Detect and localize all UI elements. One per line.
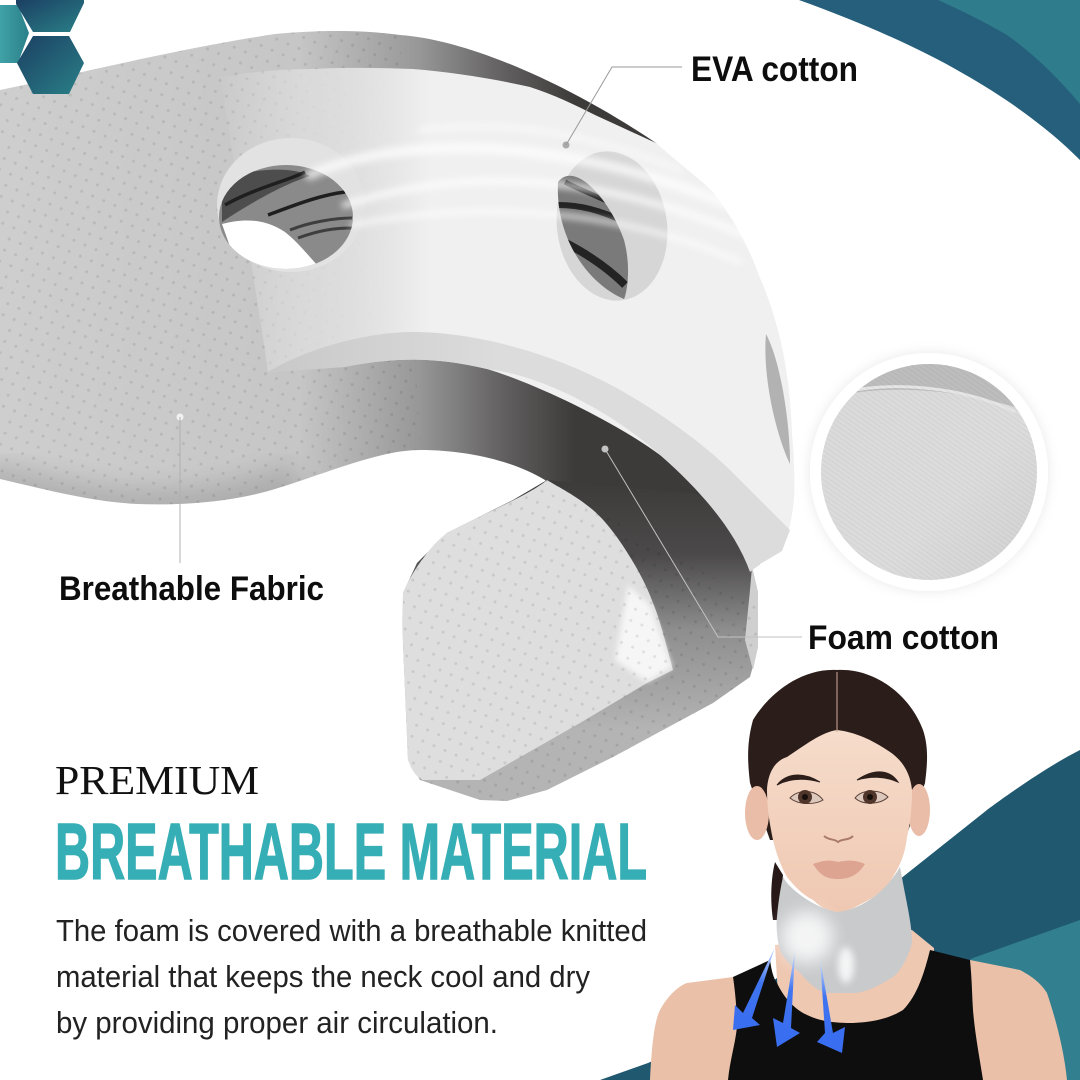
brace EVA white shell — [220, 68, 794, 564]
callout: Foam cotton — [602, 446, 999, 657]
braid — [771, 862, 783, 920]
vent hole left — [217, 138, 353, 272]
brace foam highlight — [615, 585, 672, 682]
body text: The foam is covered with a breathable knitted — [56, 913, 647, 948]
heading: premium: PREMIUM — [55, 757, 259, 803]
callout: EVA cotton — [562, 50, 858, 148]
body text: by providing proper air circulation. — [56, 1005, 498, 1040]
icon: hexagon cluster — [0, 0, 84, 94]
callout: EVA cotton: EVA cotton — [691, 50, 858, 89]
brace foam mesh — [403, 480, 758, 801]
ears — [745, 786, 769, 840]
woman with neck brace — [650, 670, 1067, 1080]
vent hole right — [556, 152, 668, 300]
brace shell rim — [268, 332, 790, 572]
neck brace on woman — [777, 867, 912, 993]
inset: knit texture circle — [810, 353, 1048, 591]
brace side hole — [765, 334, 790, 464]
callout: Foam cotton: Foam cotton — [808, 619, 999, 657]
body text — [56, 913, 647, 1040]
brace silhouette: fabric, top edge and under arch — [0, 31, 760, 660]
brace foam back facet — [403, 480, 760, 801]
face — [767, 730, 912, 912]
background shape: bottom right teal — [600, 750, 1080, 1080]
product: neck brace — [0, 31, 794, 801]
callout: Breathable Fabric — [59, 414, 324, 608]
hair parting — [836, 672, 838, 732]
fabric lower edge shading — [0, 482, 300, 510]
air flow streaks — [310, 126, 745, 262]
background shape: top right teal — [799, 0, 1080, 160]
body text: material that keeps the neck cool and dry — [56, 959, 590, 994]
eyes and brows — [777, 772, 898, 804]
nose and lips — [824, 836, 853, 842]
brace foam front face — [402, 480, 673, 780]
tank top — [728, 950, 983, 1080]
shoulders — [650, 960, 1067, 1080]
callout: Breathable Fabric: Breathable Fabric — [59, 570, 324, 608]
fabric mesh — [0, 31, 420, 504]
hair — [748, 670, 927, 840]
arrows: air flow — [733, 947, 845, 1053]
heading: breathable material: BREATHABLE MATERIAL — [55, 807, 647, 896]
neck — [775, 930, 935, 1030]
